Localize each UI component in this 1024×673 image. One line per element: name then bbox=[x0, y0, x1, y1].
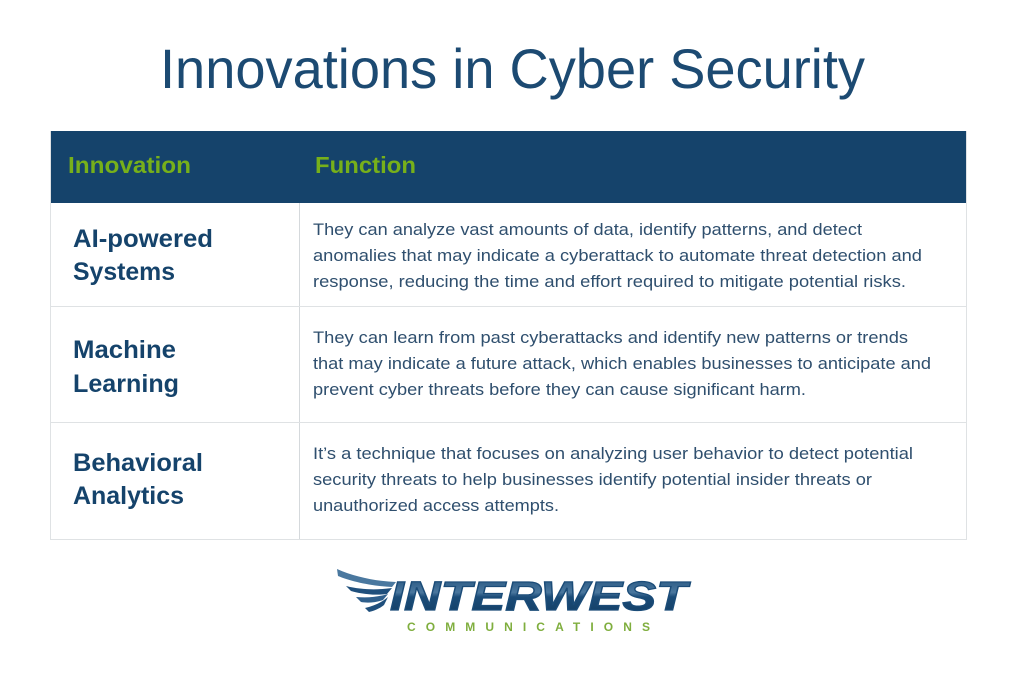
row: Machine Learning bbox=[73, 329, 931, 399]
row: Machine Learning: prevent cyber threats before they can cause significant harm. bbox=[313, 381, 806, 399]
title: Innovations in Cyber Security bbox=[160, 37, 865, 100]
row: Behavioral Analytics: Behavioral bbox=[73, 449, 203, 477]
row: AI-powered Systems bbox=[73, 221, 922, 291]
tagline: COMMUNICATIONS bbox=[407, 620, 650, 634]
row: AI-powered Systems: anomalies that may indicate a cyberattack to automate threat detection and bbox=[313, 247, 922, 265]
row: Machine Learning: Learning bbox=[73, 370, 179, 398]
row: Machine Learning: They can learn from past cyberattacks and identify new patterns or trends bbox=[313, 329, 908, 347]
row: Behavioral Analytics: unauthorized access attempts. bbox=[313, 497, 559, 515]
table frame bbox=[50, 132, 966, 540]
row: Machine Learning: that may indicate a future attack, which enables businesses to anticipate and bbox=[313, 355, 931, 373]
row: Behavioral Analytics: security threats to help businesses identify potential insider threats or bbox=[313, 471, 873, 489]
row: AI-powered Systems: AI-powered bbox=[73, 225, 213, 253]
row: Behavioral Analytics bbox=[73, 445, 913, 515]
row: Machine Learning: Machine bbox=[73, 336, 176, 364]
header: Innovation: Innovation bbox=[68, 152, 191, 178]
wordmark: INTERWEST bbox=[390, 573, 691, 619]
table bbox=[50, 131, 966, 540]
icon: wing swoosh bbox=[337, 569, 396, 612]
row: AI-powered Systems: response, reducing the time and effort required to mitigate potential risks. bbox=[313, 273, 906, 291]
row: Behavioral Analytics: Analytics bbox=[73, 482, 184, 510]
table header bar bbox=[51, 131, 966, 203]
logo: Interwest Communications bbox=[337, 569, 691, 634]
row: AI-powered Systems: They can analyze vast amounts of data, identify patterns, and detect bbox=[313, 221, 862, 239]
header: Function: Function bbox=[315, 152, 416, 178]
row: Behavioral Analytics: It’s a technique that focuses on analyzing user behavior to detect potential bbox=[313, 445, 913, 463]
row: AI-powered Systems: Systems bbox=[73, 258, 175, 286]
